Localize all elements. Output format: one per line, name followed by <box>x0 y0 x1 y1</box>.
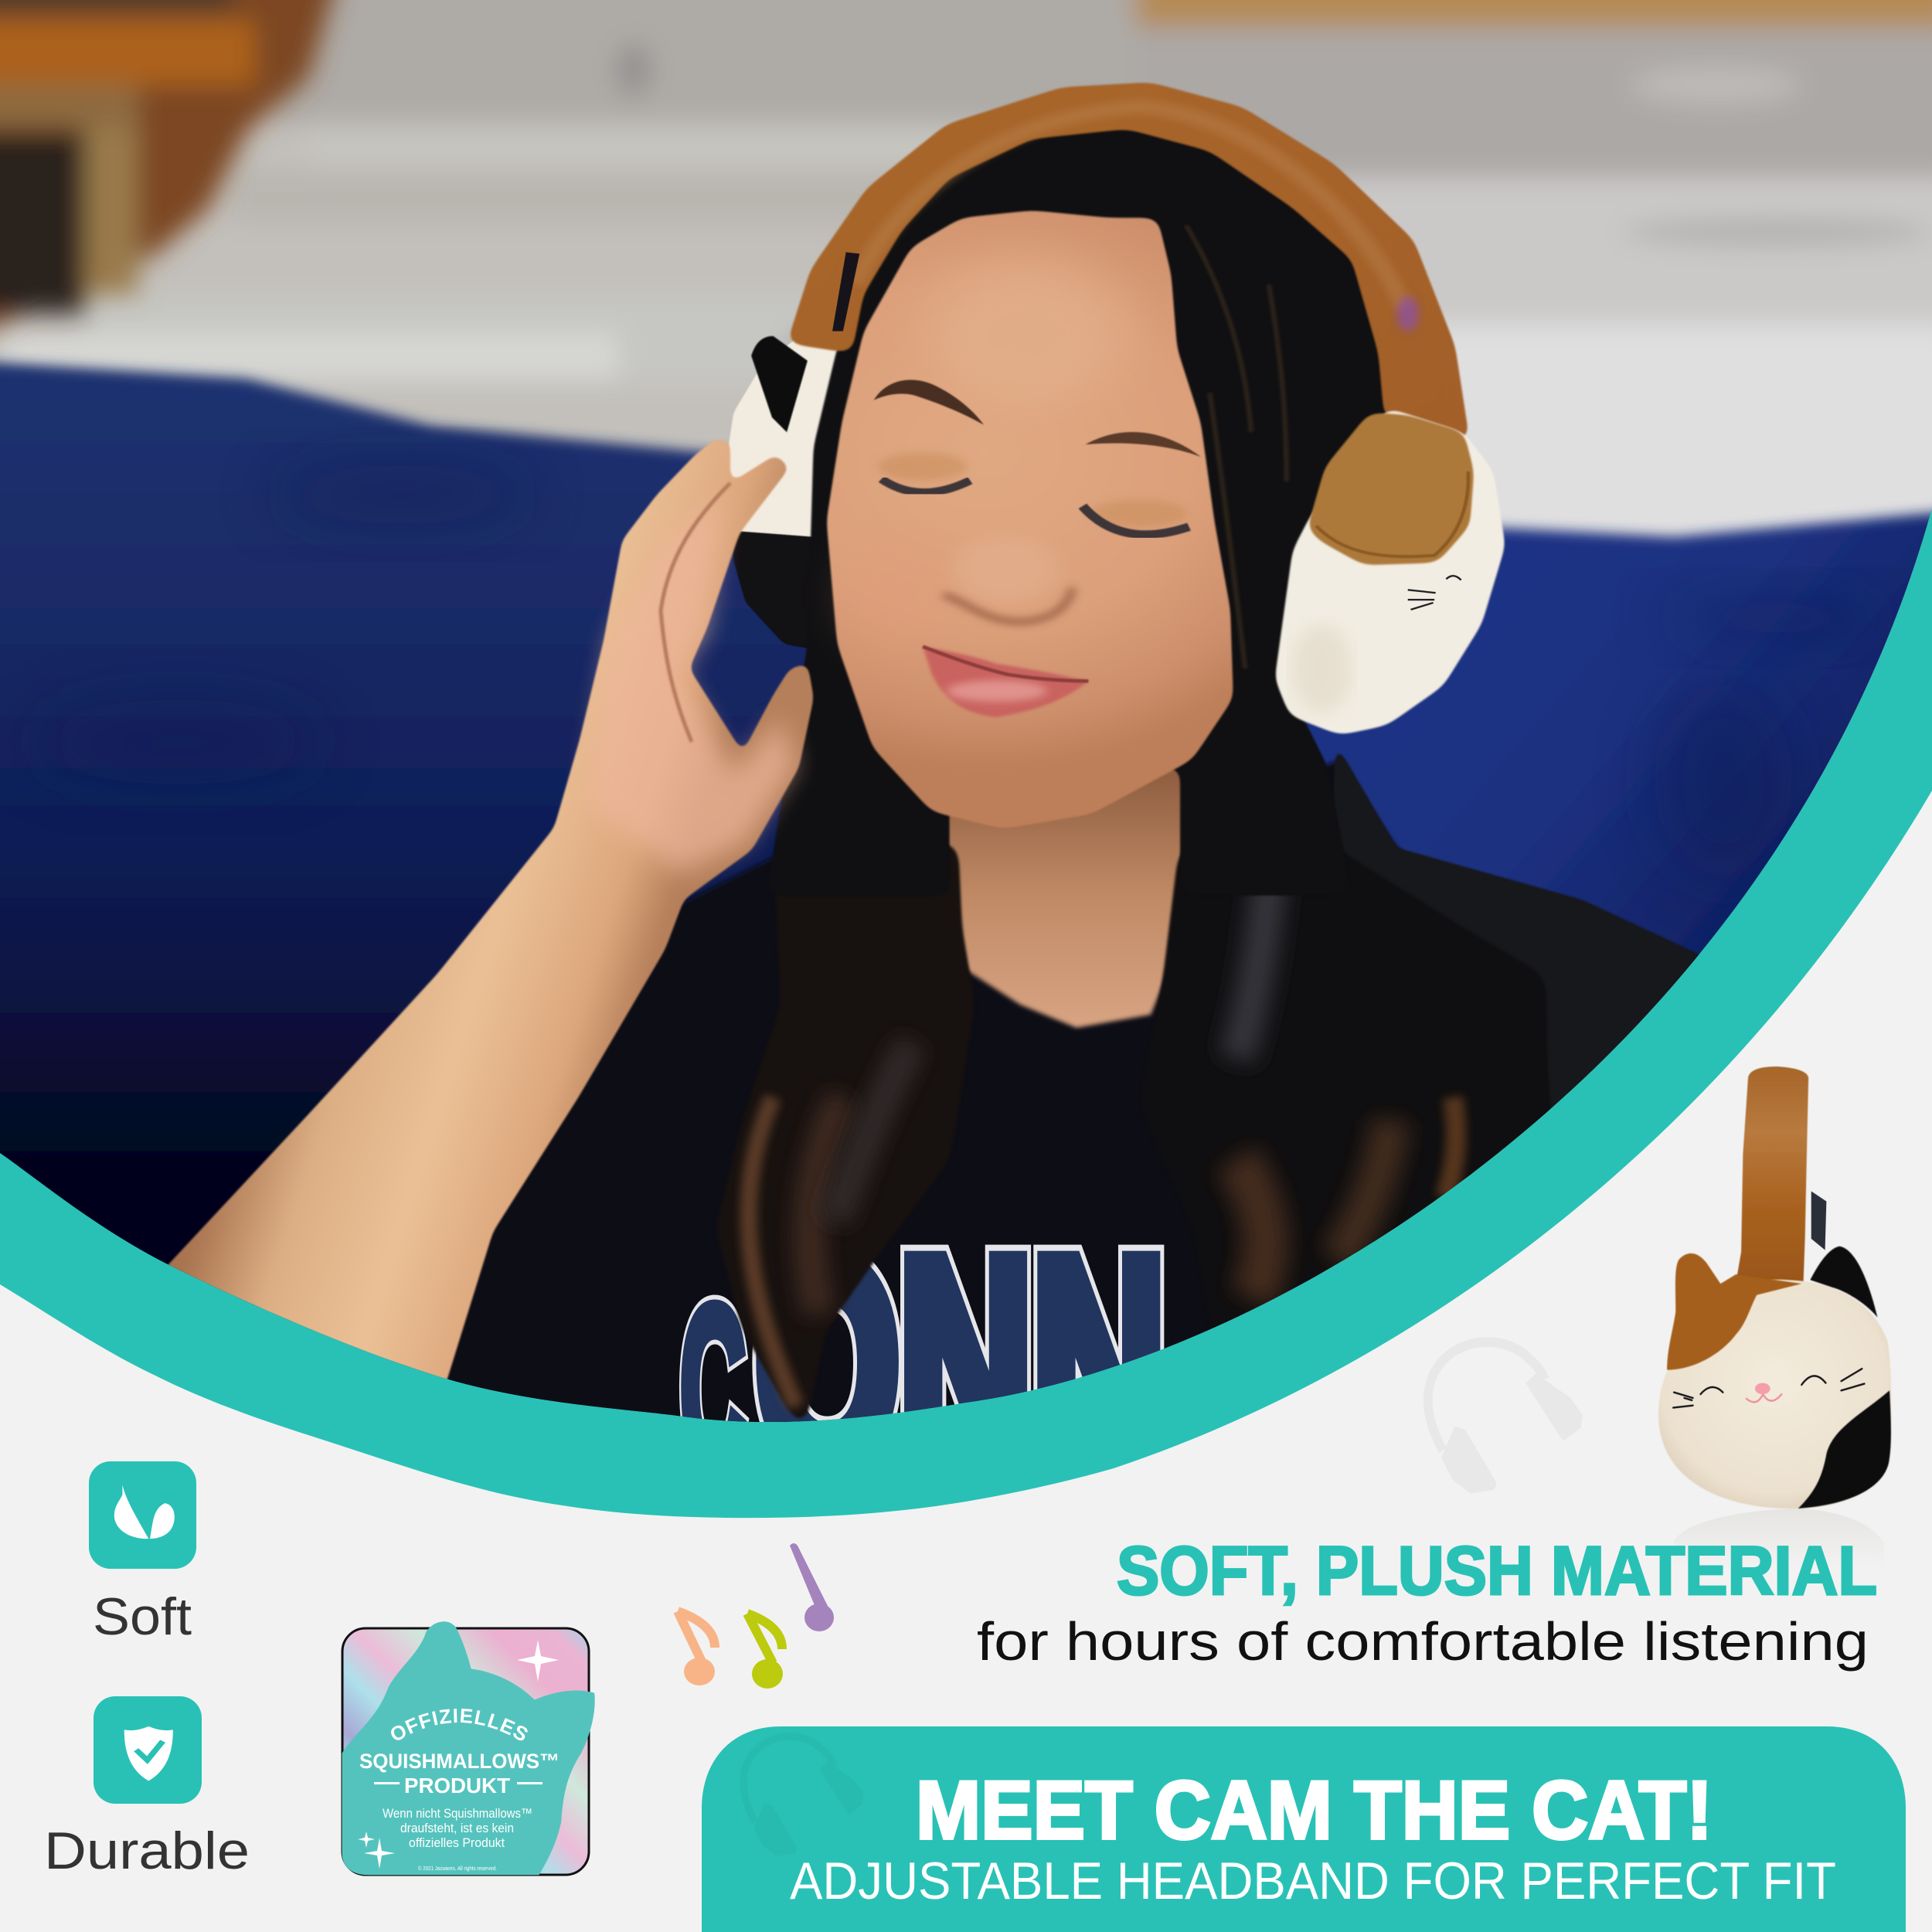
product: plush cat headphone earmuff <box>1658 1066 1891 1566</box>
hand tone overlay <box>587 495 796 873</box>
long hair lower right <box>1156 853 1550 1277</box>
black ear <box>1810 1247 1877 1318</box>
t-shirt navy varsity letters: ONN <box>756 1199 1165 1527</box>
t-shirt navy varsity letters: C <box>680 1258 746 1518</box>
heading: soft plush material: SOFT, PLUSH MATERIAL <box>1117 1532 1877 1609</box>
left eyelid <box>879 453 968 481</box>
nose <box>1755 1383 1770 1394</box>
black t-shirt <box>447 753 1699 1422</box>
plush headband <box>1736 1066 1808 1286</box>
lips <box>923 647 1088 717</box>
icon: feather <box>114 1485 175 1539</box>
plush headband <box>787 82 1470 442</box>
cat face stitching <box>1408 576 1461 610</box>
left eyebrow <box>874 379 984 425</box>
right eyelid <box>1091 500 1186 527</box>
panel: meet cam banner <box>702 1726 1906 1932</box>
hair top <box>766 112 1393 896</box>
small sparkles <box>358 1832 395 1869</box>
left ear cushion <box>725 336 855 651</box>
small print: offizielles Produkt <box>409 1835 505 1850</box>
head: hair, face and headphones <box>725 82 1505 896</box>
banner ghost headphones icon <box>743 1736 864 1856</box>
product line: PRODUKT <box>404 1774 510 1798</box>
photo background: navy blanket right <box>1275 510 1932 1082</box>
hair highlights and brown streaks <box>749 781 1456 1406</box>
arm and hand <box>158 439 814 1391</box>
long hair lower left <box>715 842 975 1437</box>
right ear cushion <box>1274 407 1505 735</box>
brown cap <box>1308 413 1474 565</box>
small print: Wenn nicht Squishmallows™ <box>383 1806 532 1821</box>
label: durable: Durable <box>44 1821 250 1880</box>
floor reflection <box>1674 1509 1884 1566</box>
right shoulder <box>1334 753 1699 1110</box>
face <box>826 210 1233 829</box>
left closed eye <box>882 479 970 492</box>
cheek blush <box>849 541 944 649</box>
mouth <box>1747 1394 1781 1402</box>
brown head patch and ear <box>1667 1253 1801 1370</box>
cat face <box>1673 1369 1864 1408</box>
banner subtitle: ADJUSTABLE HEADBAND FOR PERFECT FIT <box>790 1852 1836 1910</box>
headband fabric tag <box>832 252 859 331</box>
icon: shield check <box>124 1726 173 1781</box>
black side patch <box>1798 1390 1891 1509</box>
photo background: navy blanket left <box>0 361 889 1507</box>
neck <box>948 769 1182 1031</box>
banner title: MEET CAM THE CAT! <box>916 1764 1713 1856</box>
green note <box>747 1614 783 1689</box>
finger shadows <box>661 483 730 742</box>
product rule left <box>374 1782 400 1784</box>
blanket folds <box>1652 591 1825 864</box>
t-shirt navy varsity letters: C <box>680 1258 746 1518</box>
right eyebrow <box>1086 432 1201 457</box>
teal arc band <box>0 0 1932 1518</box>
purple note <box>790 1543 834 1631</box>
badge: soft <box>89 1461 196 1646</box>
orange note <box>678 1611 715 1685</box>
fabric tag <box>1811 1191 1826 1250</box>
t-shirt navy varsity letters: ONN <box>756 1199 1165 1527</box>
subheading: comfortable listening: for hours of comfortable listening <box>977 1611 1869 1672</box>
cream body <box>1658 1280 1891 1509</box>
photo background: bed and pillows <box>0 0 1932 896</box>
label: soft: Soft <box>93 1587 192 1646</box>
copyright: © 2021 Jazwares. All rights reserved. <box>418 1866 497 1872</box>
brand name: SQUISHMALLOWS™ <box>359 1750 560 1773</box>
hair strand highlights <box>1186 225 1287 668</box>
small print <box>383 1806 532 1850</box>
badge: durable <box>44 1696 250 1880</box>
forehead highlight <box>926 260 1127 407</box>
large sparkle <box>517 1640 559 1682</box>
photo: girl wearing plush headphones <box>0 0 1932 1527</box>
headband purple spot <box>1397 296 1418 332</box>
right closed eye <box>1083 506 1189 535</box>
product rule right <box>517 1782 543 1784</box>
photo background: wooden furniture <box>0 0 340 336</box>
small print: draufsteht, ist es kein <box>400 1821 514 1835</box>
ghost headphones icon <box>1428 1342 1583 1494</box>
music notes <box>678 1543 834 1689</box>
arched heading: OFFIZIELLES <box>391 1708 528 1740</box>
official product badge <box>342 1621 595 1876</box>
t-shirt navy varsity letters <box>679 1244 1164 1422</box>
cap seam <box>1316 471 1468 556</box>
nose <box>944 536 1073 622</box>
cat silhouette <box>342 1621 595 1875</box>
